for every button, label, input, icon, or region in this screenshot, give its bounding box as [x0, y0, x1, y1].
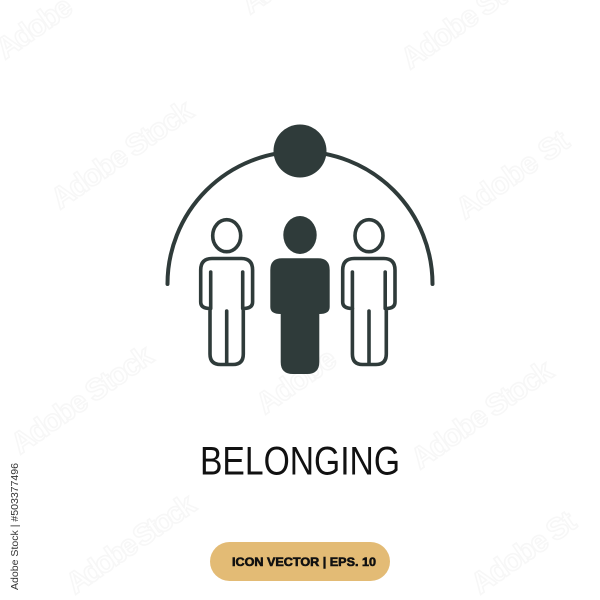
badge: icon vector: ICON VECTOR | EPS. 10 — [232, 555, 376, 569]
infographic canvas: Adobe Stock — [60, 487, 202, 600]
title: BELONGING — [200, 439, 400, 483]
top circle — [274, 124, 326, 178]
infographic canvas: Adobe Stock — [5, 339, 159, 461]
infographic canvas: Adobe — [250, 342, 343, 421]
infographic canvas: Adobe Stock — [45, 94, 199, 216]
infographic canvas: Adobe St — [465, 505, 582, 600]
infographic canvas: Adobe St — [450, 124, 576, 226]
icon: belonging group under arc — [168, 124, 432, 374]
arc — [168, 152, 432, 284]
right person outline — [343, 220, 395, 364]
infographic canvas: Adobe Stock — [405, 354, 559, 476]
center person solid — [270, 216, 330, 374]
badge: icon vector — [210, 542, 390, 581]
stock id side text: Adobe Stock | #503377496 — [9, 463, 21, 590]
left person outline — [201, 220, 253, 364]
